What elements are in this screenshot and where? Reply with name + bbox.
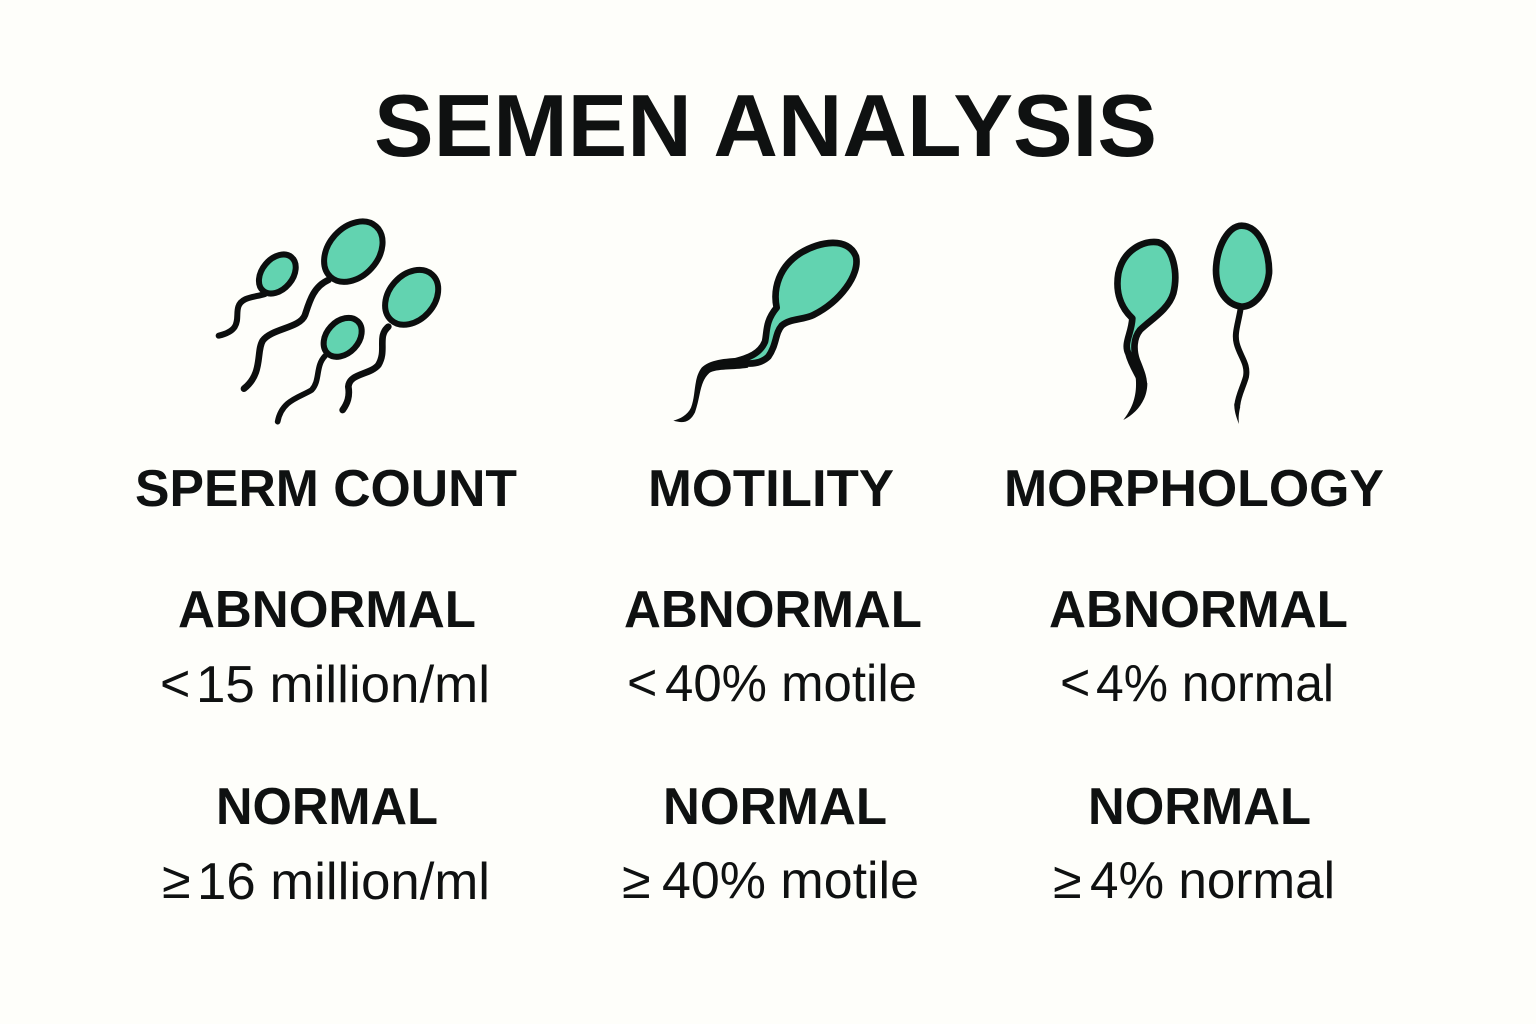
abnormal value: < bbox=[160, 655, 190, 713]
icon: single sperm with tapered neck bbox=[673, 243, 857, 422]
abnormal value: < bbox=[1060, 654, 1090, 712]
normal value: 4% normal bbox=[1090, 852, 1335, 910]
abnormal value: 40% motile bbox=[665, 655, 917, 713]
heading: motility: MOTILITY bbox=[648, 460, 894, 518]
normal value: 16 million/ml bbox=[197, 853, 490, 911]
icon: group of sperm bbox=[219, 210, 449, 422]
panel: morphology bbox=[1004, 226, 1384, 910]
abnormal value: 15 million/ml bbox=[196, 656, 490, 714]
heading: sperm count: SPERM COUNT bbox=[135, 460, 517, 518]
panel: motility bbox=[622, 243, 922, 910]
normal label: NORMAL bbox=[1088, 778, 1311, 836]
normal label: NORMAL bbox=[663, 778, 887, 836]
abnormal value: < bbox=[627, 654, 657, 712]
normal value: ≥ bbox=[162, 852, 191, 910]
panel: sperm count bbox=[135, 210, 517, 911]
normal value: 40% motile bbox=[662, 852, 919, 910]
abnormal value: 4% normal bbox=[1096, 655, 1334, 713]
abnormal label: ABNORMAL bbox=[178, 581, 476, 639]
title: SEMEN ANALYSIS bbox=[374, 76, 1157, 175]
abnormal label: ABNORMAL bbox=[1049, 581, 1348, 639]
heading: morphology: MORPHOLOGY bbox=[1004, 460, 1384, 518]
normal value: ≥ bbox=[622, 852, 651, 910]
normal value: ≥ bbox=[1053, 852, 1082, 910]
icon: abnormal and normal sperm bbox=[1117, 226, 1269, 424]
abnormal label: ABNORMAL bbox=[624, 581, 922, 639]
normal label: NORMAL bbox=[216, 778, 438, 836]
